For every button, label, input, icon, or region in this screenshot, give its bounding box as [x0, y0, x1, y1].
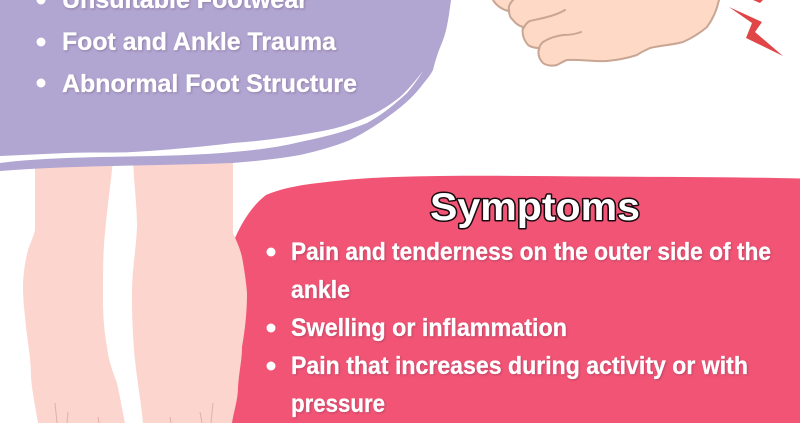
left leg: [23, 160, 125, 423]
icon: pain lightning bolt: [729, 0, 783, 56]
toe lines: [509, 0, 581, 50]
right leg: [132, 160, 247, 423]
panel: symptoms: [232, 176, 800, 423]
symptoms list: pressure: [291, 390, 385, 418]
causes list: Abnormal Foot Structure: [62, 70, 357, 98]
symptoms list: Pain that increases during activity or with: [291, 352, 748, 380]
causes background: [0, 0, 451, 171]
panel: causes: [0, 0, 451, 171]
symptoms list: Swelling or inflammation: [291, 314, 567, 342]
illustration: swollen ankles: [23, 160, 247, 423]
causes list: Foot and Ankle Trauma: [62, 28, 337, 56]
symptoms background: [232, 176, 800, 423]
symptoms heading: Symptoms: [430, 186, 640, 229]
symptoms list: ankle: [291, 276, 350, 304]
causes list: [36, 0, 357, 98]
toe creases: [55, 403, 213, 423]
illustration: injured foot: [493, 0, 719, 66]
symptoms list: [266, 238, 771, 418]
foot outline: [493, 0, 719, 66]
